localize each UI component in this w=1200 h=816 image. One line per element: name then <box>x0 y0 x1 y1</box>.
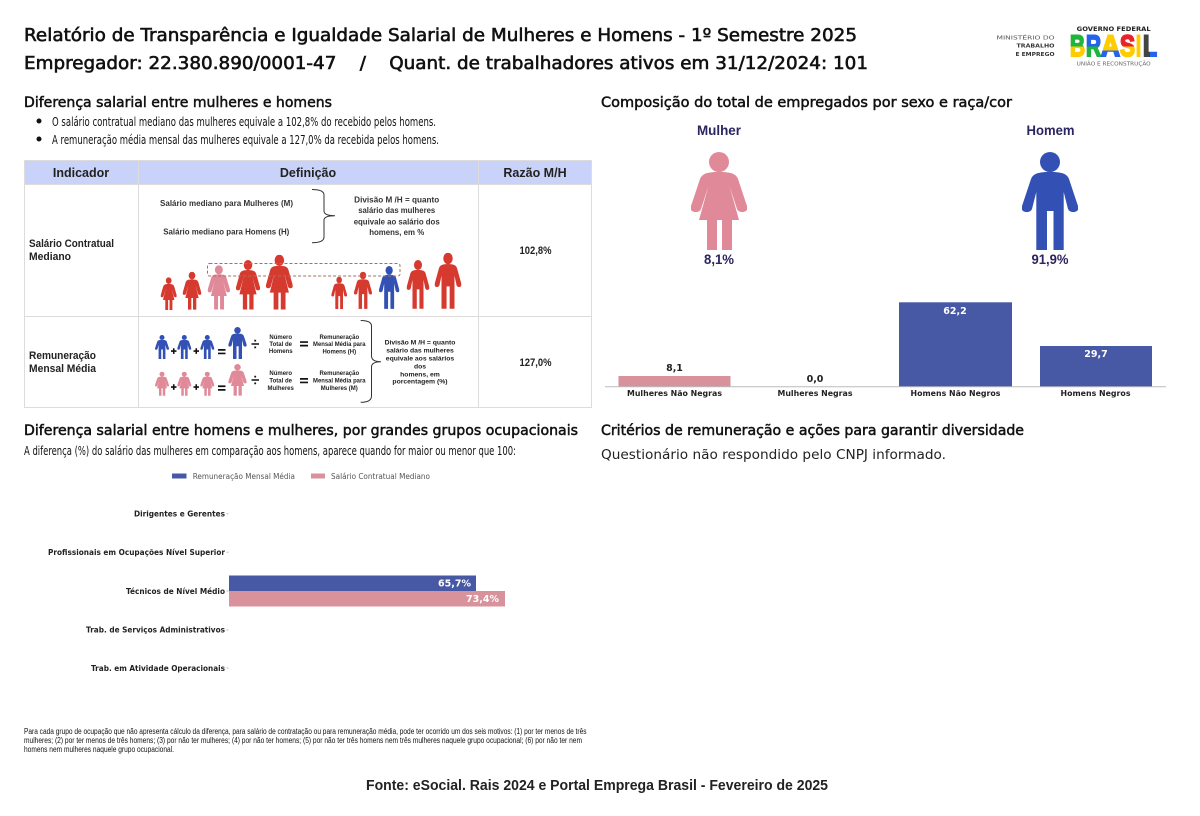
formula text: Mulheres (M) <box>321 386 358 392</box>
category labels: Mulheres Não Negras <box>627 389 723 398</box>
brace <box>361 320 381 402</box>
heading: grupos ocupacionais: Diferença salarial entre homens e mulheres, por grandes grupos ocupacionais <box>24 423 578 439</box>
formula text: Número <box>269 335 292 341</box>
icon: woman <box>691 152 747 250</box>
brace <box>312 190 335 243</box>
logo: ministério do trabalho e emprego <box>996 34 1055 58</box>
bar: salário contratual mediano <box>229 591 505 606</box>
category labels: Técnicos de Nível Médio <box>126 587 225 596</box>
median highlight box <box>208 264 400 276</box>
bar values: 29,7 <box>1084 349 1108 360</box>
category labels: Mulheres Negras <box>778 389 853 398</box>
logo: governo federal brasil: R <box>1086 30 1101 63</box>
icons: women formula <box>155 364 247 396</box>
category labels: Trab. em Atividade Operacionais <box>91 664 226 673</box>
logo: ministério do trabalho e emprego: E EMPREGO <box>1016 52 1055 58</box>
icons: men by salary <box>331 253 461 309</box>
value: 127,0% <box>520 357 552 369</box>
logo: governo federal brasil: A <box>1101 30 1120 63</box>
definition text: salário das mulheres <box>358 206 436 215</box>
definition text: Divisão M /H = quanto <box>354 196 439 204</box>
value: mulher: 8,1% <box>704 251 735 267</box>
footnote: Para cada grupo de ocupação que não apresenta cálculo da diferença, para salário de contratação ou para remuneração média, pode ter ocorrido um dos seis motivos: (1) por ter menos de três <box>24 727 586 736</box>
title: Empregador: 22.380.890/0001-47 / Quant. de trabalhadores ativos em 31/12/2024: 101 <box>24 54 868 74</box>
formula text: Mensal Média para <box>313 342 366 348</box>
panel: grupos ocupacionais <box>24 423 586 754</box>
formula text: Remuneração <box>319 371 359 377</box>
bullet list: O salário contratual mediano das mulheres equivale a 102,8% do recebido pelos homens. <box>52 115 436 129</box>
division text: Divisão M /H = quanto <box>385 340 455 347</box>
legend: Salário Contratual Mediano <box>331 472 430 481</box>
definition text: Salário mediano para Homens (H) <box>163 228 290 236</box>
footnote: homens nem mulheres naquele grupo ocupacional. <box>24 745 174 754</box>
bars <box>605 302 1166 387</box>
footnote <box>24 727 586 754</box>
panel: critérios <box>601 423 1024 463</box>
logo: governo federal brasil: L <box>1143 30 1157 63</box>
title <box>24 26 868 74</box>
division text: dos <box>414 364 426 370</box>
value: homem: 91,9% <box>1032 251 1069 267</box>
icons: men formula <box>155 327 247 359</box>
title: Relatório de Transparência e Igualdade Salarial de Mulheres e Homens - 1º Semestre 2025 <box>24 26 857 46</box>
logo: governo federal brasil <box>1070 26 1157 68</box>
icons: women by salary <box>161 255 293 310</box>
row label: Mediano <box>29 251 71 263</box>
logo: governo federal brasil: I <box>1136 30 1141 63</box>
legend: Remuneração Mensal Média <box>193 471 295 481</box>
label: mulher: Mulher <box>697 122 742 138</box>
heading: composição: Composição do total de empregados por sexo e raça/cor <box>601 95 1012 111</box>
formula text: Total de <box>269 342 293 348</box>
division text: homens, em <box>400 371 440 378</box>
formula text: Total de <box>269 378 293 384</box>
footnote: mulheres; (2) por ter menos de três homens; (3) por não ter mulheres; (4) por não ter homens; (5) por não ter três homens nem três mulheres naquele grupo ocupacional; (6) por não ter nem <box>24 736 582 745</box>
logo: governo federal brasil: S <box>1120 30 1135 63</box>
bar values: 8,1 <box>666 363 683 374</box>
category labels: Homens Não Negros <box>910 389 1001 398</box>
bar: remuneração mensal média <box>229 576 476 591</box>
bar values <box>666 306 1108 385</box>
row label: Salário Contratual <box>29 238 114 250</box>
panel: diferença salarial <box>24 95 439 147</box>
formula text: Homens (H) <box>322 349 356 355</box>
panel: composição <box>601 95 1166 398</box>
horizontal bar chart <box>48 510 505 673</box>
category labels: Dirigentes e Gerentes <box>134 510 226 518</box>
definition text: homens, em % <box>369 228 424 237</box>
row label <box>29 350 97 375</box>
row: salário contratual mediano <box>29 190 552 310</box>
logo: governo federal brasil: B <box>1070 30 1085 63</box>
heading: diferença salarial: Diferença salarial entre mulheres e homens <box>24 95 332 111</box>
definition text: equivale ao salário dos <box>354 218 440 226</box>
definition text: Salário mediano para Mulheres (M) <box>160 199 293 208</box>
table header <box>24 160 592 184</box>
bar values: 0,0 <box>807 374 824 385</box>
formula text: Remuneração <box>319 335 359 341</box>
subtitle: A diferença (%) do salário das mulheres em comparação aos homens, aparece quando for maior ou menor que 100: <box>24 444 516 458</box>
row: remuneração mensal média <box>29 320 552 402</box>
formula text: Mulheres <box>268 386 295 392</box>
bar value: 65,7%: 65,7% <box>438 578 471 589</box>
category labels: Homens Negros <box>1060 389 1131 398</box>
row label <box>29 238 114 263</box>
bar value: 73,4%: 73,4% <box>466 594 499 605</box>
division text: salário das mulheres <box>386 348 454 355</box>
division text: equivale aos salários <box>386 356 454 363</box>
table header: Indicador <box>53 166 109 180</box>
bullet list <box>36 115 439 147</box>
value: 102,8% <box>520 245 552 257</box>
row label: Mensal Média <box>29 363 97 375</box>
logos: ministério and governo federal <box>996 26 1157 68</box>
table header: Razão M/H <box>503 166 567 180</box>
category labels <box>627 389 1131 398</box>
logo: ministério do trabalho e emprego: TRABALHO <box>1016 44 1055 50</box>
bullet list: A remuneração média mensal das mulheres equivale a 127,0% da recebida pelos homens. <box>52 133 439 147</box>
category labels: Profissionais em Ocupações Nível Superior <box>48 548 225 557</box>
formula text: Mensal Média para <box>313 378 366 384</box>
label: homem: Homem <box>1026 122 1074 138</box>
row label: Remuneração <box>29 350 96 362</box>
table header: Definição <box>280 166 336 180</box>
category labels: Trab. de Serviços Administrativos <box>86 626 226 634</box>
bar values: 62,2 <box>943 306 967 317</box>
formula text: Número <box>269 371 292 377</box>
definition text <box>160 196 440 237</box>
division text <box>385 340 455 386</box>
logo: governo federal brasil: UNIÃO E RECONSTRUÇÃO <box>1077 60 1151 68</box>
questionnaire note: Questionário não respondido pelo CNPJ informado. <box>601 447 946 463</box>
icon: man <box>1022 152 1078 250</box>
division text: porcentagem (%) <box>392 379 448 386</box>
formula text: Homens <box>269 349 293 355</box>
category labels <box>48 510 226 673</box>
logo: ministério do trabalho e emprego: MINISTÉRIO DO <box>996 34 1055 42</box>
logo: governo federal brasil: GOVERNO FEDERAL <box>1077 26 1151 33</box>
heading: critérios: Critérios de remuneração e ações para garantir diversidade <box>601 423 1024 439</box>
source: Fonte: eSocial. Rais 2024 e Portal Emprega Brasil - Fevereiro de 2025 <box>366 778 828 794</box>
formula text <box>268 335 366 392</box>
legend <box>172 471 430 481</box>
panel: indicator table <box>24 160 592 408</box>
bar chart: sexo e raça/cor <box>605 302 1166 398</box>
formula operators <box>171 340 308 391</box>
